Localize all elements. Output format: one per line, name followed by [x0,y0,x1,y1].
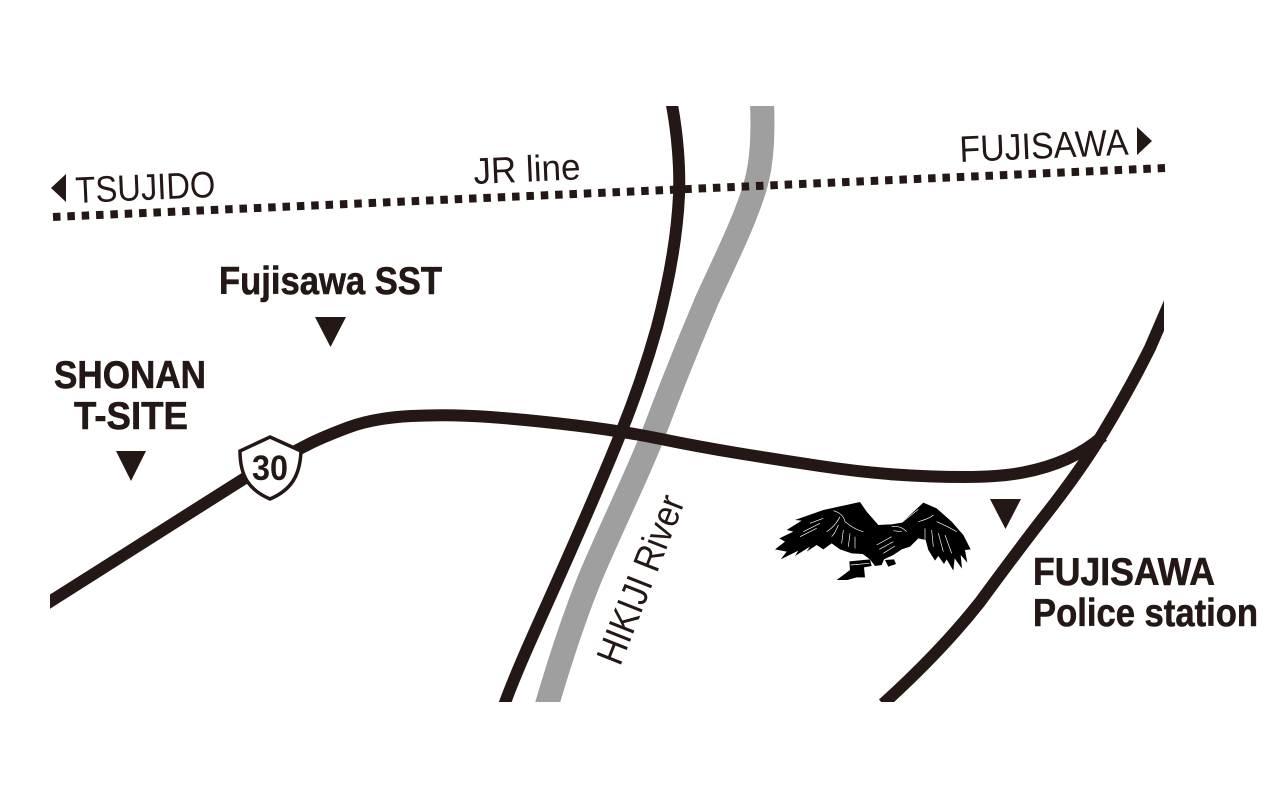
road: route 30 [40,415,1103,608]
label: Shonan T-Site [54,354,206,438]
route 30 shield: 30 [252,449,288,488]
label: JR line: JR line [473,146,581,192]
JR railway line [53,168,1165,217]
label: Shonan T-Site: SHONAN [54,354,206,397]
label: Fujisawa Police station: Police station [1033,592,1258,635]
marker: police station [990,499,1021,529]
label: Hikiji River: HIKIJI River [589,489,694,670]
road: north-south left [503,100,679,708]
road: north-south right [883,297,1172,704]
icon: hawk [775,502,971,580]
label: Fujisawa SST: Fujisawa SST [219,260,442,303]
label: Fujisawa Police station [1033,551,1258,635]
marker: Shonan T-Site [116,451,146,481]
marker: Fujisawa SST [315,317,346,347]
route 30 shield [240,437,301,499]
label: Tsujido direction: TSUJIDO [75,164,216,211]
label: Fujisawa direction: FUJISAWA [959,122,1129,170]
label: Shonan T-Site: T-SITE [74,395,188,438]
label: Fujisawa Police station: FUJISAWA [1033,551,1215,594]
river: Hikiji [546,100,762,708]
